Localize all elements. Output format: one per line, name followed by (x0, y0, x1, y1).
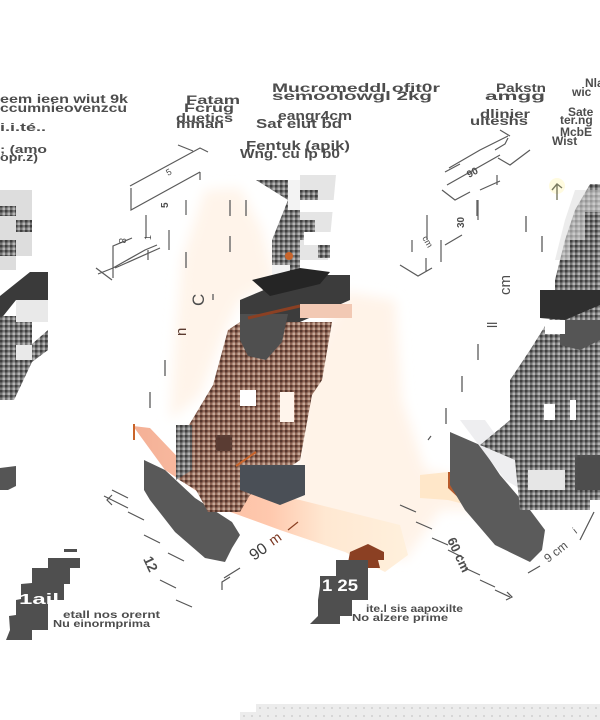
text block: far right (552, 76, 600, 148)
text block: upper right: dlinier (480, 107, 530, 121)
far-left small dark wheel piece (0, 466, 16, 490)
left horse neck mane (256, 180, 300, 300)
text block: top left: ccumnieovenzcu (0, 101, 127, 115)
text block: far right: Sate (568, 105, 594, 119)
brown rocker end (347, 544, 384, 568)
left horse mane tufts (300, 175, 336, 260)
text block: upper right: ulteshs (470, 114, 528, 128)
dimension box left labels: 1 (143, 235, 153, 240)
text block: upper centre-left (176, 93, 240, 131)
orange rocker tip (133, 424, 135, 440)
text block: upper centre: Wng. cu lp b0 (240, 146, 340, 161)
text block: upper centre-left: Fcrug (184, 101, 234, 115)
left rocker in peach (133, 424, 408, 572)
depth dimension left (104, 490, 192, 607)
left horse cream head and body (170, 188, 275, 420)
length dimension and label, left rocker: 90 (247, 540, 271, 564)
caption left (53, 609, 161, 630)
left horse brown houndstooth body (176, 322, 332, 512)
dimension box right labels: 30 (456, 216, 467, 228)
text block: upper centre: Sat elut bd (256, 116, 342, 131)
dimension box right labels: cm (420, 234, 435, 249)
caption right: ite.l sis aapoxilte (366, 603, 463, 615)
text block: top left: ; (amo (0, 144, 47, 156)
dimension box right labels (420, 166, 481, 249)
text block: top left: i.i.té.. (0, 122, 46, 134)
text block: far right: Wist (552, 134, 577, 148)
depth label left: 12 (140, 554, 161, 575)
dimension box right labels: 90 (465, 166, 481, 181)
far-left cropped horse mane and body (0, 190, 48, 400)
badge left (6, 549, 80, 640)
leg lower grey stripe (176, 425, 192, 480)
left horse hoof (240, 465, 305, 505)
dimension box left labels: 5 (164, 167, 173, 178)
depth label right: 60 cm (444, 535, 473, 575)
bottom dotted strip (240, 704, 600, 720)
saddle on left horse (240, 268, 352, 360)
right-edge horse in grey check (480, 184, 600, 510)
right horse base pale tray (460, 420, 580, 505)
text block: upper centre-left: Fatam (186, 93, 240, 107)
text block: upper right: amgg (485, 89, 545, 103)
length dimension right (528, 512, 594, 573)
depth dimension right (400, 436, 512, 600)
left rocker shadow (144, 460, 240, 562)
height label right: cm (497, 275, 514, 295)
text block: upper right: Pakstn (496, 81, 546, 95)
text block: upper centre: Mucromeddl ofit0r (272, 81, 441, 95)
text block: far right: wic (571, 85, 592, 99)
height dimension line left (150, 200, 246, 408)
badge left: 1ail (19, 591, 59, 608)
caption left: etall nos orernt (63, 609, 161, 621)
text block: upper centre-left: mman (176, 117, 224, 131)
text block: far right: McbE (560, 125, 592, 139)
length dimension right: i (571, 526, 580, 536)
dimension box left labels: 5 (160, 202, 171, 208)
caption right (352, 603, 463, 624)
text block: upper centre (240, 81, 441, 161)
badge right (310, 560, 368, 624)
text block: upper centre: Fentuk (apik) (246, 138, 350, 153)
right rocker orange patch (420, 470, 497, 510)
length dimension and label, left rocker: m (266, 529, 284, 548)
dimension box right (400, 130, 530, 276)
height label left: n (173, 328, 190, 336)
text block: upper centre: semoolowgl 2kg (272, 89, 432, 103)
text block: top left: eem ieen wiut 9k (0, 92, 128, 106)
height label right (484, 275, 514, 328)
text block: top left: opr.z) (0, 152, 38, 164)
text block: far right: ter.ng (560, 113, 593, 127)
right-edge mane tufts (555, 190, 600, 260)
caption left: Nu einormprima (53, 618, 150, 630)
length dimension and label, left rocker (222, 522, 298, 590)
height label left (173, 294, 208, 336)
height label right: ll (484, 322, 500, 328)
right horse cream body (240, 292, 490, 560)
height label left: C (189, 294, 208, 306)
text block: upper centre-left: duetics (176, 111, 233, 125)
length dimension right: 9 cm (541, 538, 570, 565)
arrow yellow glow (549, 178, 565, 200)
text block: upper centre: eangr4cm (278, 108, 352, 123)
dimension box left (96, 145, 208, 280)
dimension box left labels: 8 (116, 238, 127, 244)
badge right: 1 25 (322, 576, 358, 595)
text block: top left (0, 92, 128, 164)
text block: upper right (470, 81, 546, 128)
dimension box left labels (116, 167, 173, 244)
right rocker shadow (450, 432, 545, 562)
height dimension line right (446, 200, 542, 424)
caption right: No alzere prime (352, 612, 448, 624)
